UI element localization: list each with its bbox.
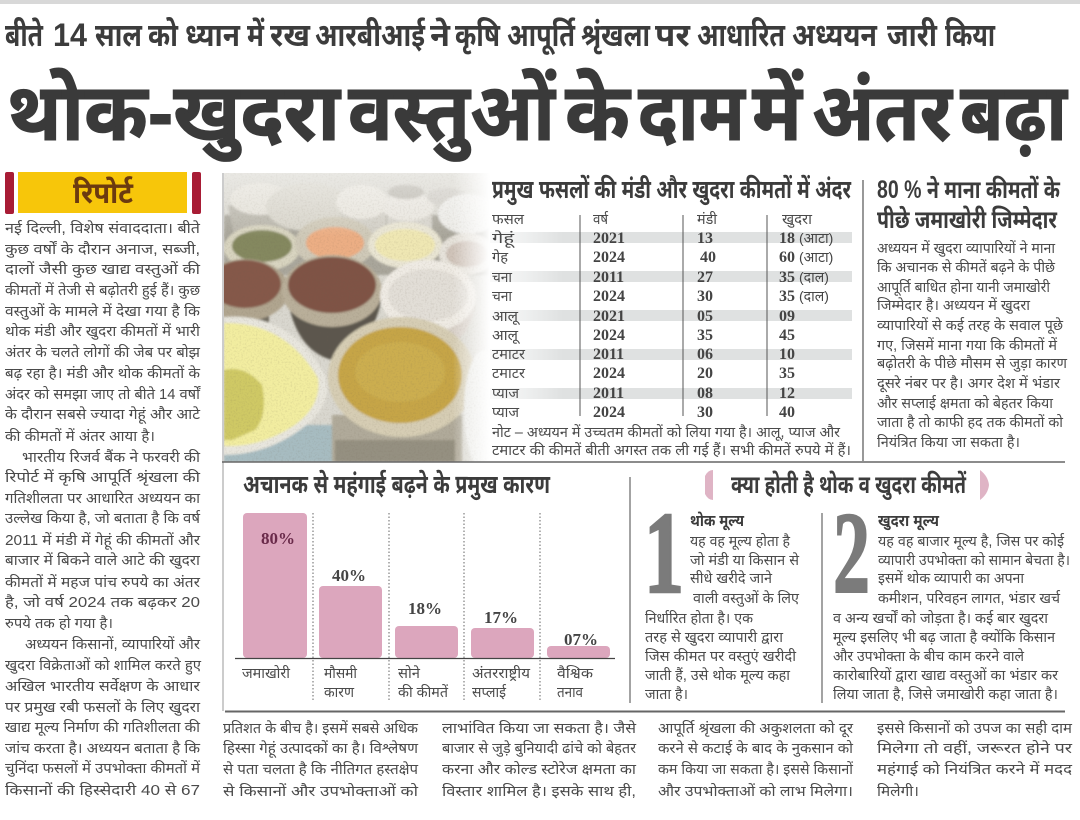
- retail price text: यह वह बाजार मूल्य है, जिस पर कोई: [878, 533, 1065, 551]
- panel: bar chart of causes: [235, 469, 615, 702]
- text block: main article column: कुछ वर्षों के दौरान अनाज, सब्जी,: [5, 240, 200, 259]
- bar values: 07%: [564, 630, 598, 649]
- text block: main article column: जांच करता है। अध्ययन बताता है कि: [5, 740, 201, 757]
- table mandi prices: [697, 230, 716, 421]
- text block: main article column: रुपये तक हो गया है।: [5, 614, 113, 632]
- table mandi prices: 27: [697, 269, 713, 286]
- table years: 2021: [593, 308, 625, 325]
- table mandi prices: 05: [697, 308, 713, 325]
- table retail prices: [779, 230, 833, 421]
- text block: main article column: बाजार में बिकने वाले आटे की खुदरा: [5, 551, 200, 570]
- retail price text: इसमें थोक व्यापारी का अपना: [878, 570, 1024, 587]
- text block: main article column: रिपोर्ट में कृषि आपूर्ति श्रृंखला की: [5, 469, 200, 487]
- title: दाम: [638, 68, 747, 157]
- text block: main article column: पर प्रमुख रबी फसलों के लिए खुदरा: [5, 698, 200, 717]
- table retail prices: 60 (आटा): [779, 249, 833, 266]
- hoarding body text: कि अचानक से कीमतें बढ़ने के पीछे: [877, 258, 1056, 276]
- text block: article continuation columns: मिलेगी।: [877, 782, 919, 800]
- text block: main article column: अंदर को समझा जाए तो बीते 14 वर्षों: [5, 385, 201, 403]
- panel: wholesale and retail explained: [644, 470, 1070, 703]
- bar labels: की कीमतें: [398, 684, 449, 701]
- hoarding body text: दूसरे नंबर पर है। अगर देश में भंडार: [877, 374, 1061, 393]
- hoarding body text: बढ़ोतरी के पीछे मौसम से जुड़ा कारण: [877, 354, 1068, 373]
- text block: main article column: अंतर के चलते लोगों की जेब पर बोझ: [5, 343, 201, 361]
- text block: article continuation columns: इससे किसानों को उपज का सही दाम: [877, 719, 1072, 737]
- wholesale price text: जाती हैं, उसे थोक मूल्य कहा: [645, 666, 790, 685]
- hoarding body text: आपूर्ति बाधित होना यानी जमाखोरी: [877, 279, 1050, 297]
- table header: फसल: [492, 212, 525, 228]
- report banner: [5, 172, 201, 214]
- retail price text: खुदरा मूल्य: [878, 513, 940, 531]
- text block: main article column: कीमतों में महज पांच रुपये का अंतर: [5, 573, 201, 591]
- bar values: 18%: [408, 599, 442, 618]
- subtitle: किया: [945, 17, 995, 53]
- wholesale price text: जिस कीमत पर वस्तुएं खरीदी: [645, 648, 796, 666]
- retail price text: लिया जाता है, जिसे जमाखोरी कहा जाता है।: [833, 685, 1058, 703]
- table note: नोट – अध्ययन में उच्चतम कीमतों को लिया गया है। आलू, प्याज और: [492, 424, 841, 442]
- wholesale price text: जाता है।: [645, 686, 688, 703]
- table mandi prices: 20: [697, 365, 713, 382]
- text block: article continuation columns: करना और कोल्ड स्टोरेज क्षमता का: [442, 760, 636, 778]
- subtitle: बीते: [5, 17, 44, 53]
- table mandi prices: 35: [697, 327, 713, 344]
- hoarding body text: [877, 239, 1068, 451]
- text block: main article column: के दौरान सबसे ज्यादा गेहूं और आटे: [5, 405, 201, 424]
- text block: article continuation columns: से पता चलता है कि नीतिगत हस्तक्षेप: [223, 760, 419, 778]
- text block: main article column: [5, 219, 202, 799]
- text block: main article column: की कीमतों में अंतर आया है।: [5, 428, 155, 445]
- subtitle: में: [247, 17, 265, 53]
- text block: main article column: खाद्य मूल्य निर्माण की गतिशीलता की: [5, 719, 200, 737]
- title: [7, 67, 1068, 162]
- text block: main article column: थोक मंडी और खुदरा कीमतों में भारी: [5, 323, 200, 341]
- wholesale price text: थोक मूल्य: [690, 512, 745, 531]
- hoarding body text: व्यापारियों से कई तरह के सवाल पूछे: [877, 316, 1064, 335]
- table shaded rows: [490, 232, 852, 399]
- table heading: प्रमुख फसलों की मंडी और खुदरा कीमतों में अंदर: [492, 174, 851, 205]
- subtitle: कृषि: [455, 17, 501, 55]
- bar labels: सप्लाई: [472, 684, 507, 701]
- table retail prices: 18 (आटा): [779, 230, 833, 247]
- table crop names: चना: [492, 289, 512, 305]
- wholesale price text: निर्धारित होता है। एक: [645, 610, 754, 627]
- table mandi prices: 13: [697, 230, 713, 247]
- retail price text: और उपभोक्ता के बीच काम करने वाले: [833, 647, 1025, 665]
- text block: main article column: वस्तुओं के मामले में देखा गया है कि: [5, 302, 201, 321]
- text block: article continuation columns: से किसानों और उपभोक्ताओं को: [223, 782, 418, 800]
- retail price text: व अन्य खर्चों को जोड़ता है। कई बार खुदरा: [833, 610, 1048, 628]
- table years: 2011: [593, 269, 624, 286]
- bar values: [261, 529, 598, 649]
- table retail prices: 12: [779, 385, 795, 402]
- subtitle: आरबीआई: [315, 17, 426, 53]
- table crop names: [492, 229, 526, 421]
- bars: [243, 513, 610, 658]
- subtitle: आपूर्ति: [507, 17, 576, 55]
- text block: article continuation columns: [223, 719, 1073, 800]
- wholesale price text: यह वह मूल्य होता है: [690, 533, 790, 551]
- subtitle: अध्ययन: [792, 17, 878, 53]
- table retail prices: 10: [779, 346, 795, 363]
- panel rules: [222, 173, 1065, 712]
- table header: [492, 211, 812, 229]
- subtitle: पर: [655, 17, 691, 53]
- title: अंतर: [812, 68, 954, 157]
- retail price text: कमीशन, परिवहन लागत, भंडार खर्च: [878, 590, 1061, 607]
- subtitle: आधारित: [697, 17, 786, 53]
- table crop names: टमाटर: [492, 347, 526, 363]
- text block: article continuation columns: करने से कटाई के बाद के नुकसान को: [658, 739, 853, 758]
- wholesale price text: जो मंडी या किसान से: [690, 551, 799, 569]
- text block: main article column: नई दिल्ली, विशेष संवाददाता। बीते: [5, 219, 201, 237]
- table years: 2011: [593, 385, 624, 402]
- text block: main article column: भारतीय रिजर्व बैंक ने फरवरी की: [22, 448, 200, 466]
- table retail prices: 35: [779, 365, 795, 382]
- table mandi prices: 40: [700, 249, 716, 266]
- text block: article continuation columns: लाभांवित किया जा सकता है। जैसे: [442, 719, 636, 737]
- table note: [492, 424, 851, 459]
- text block: article continuation columns: महंगाई को नियंत्रित करने में मदद: [877, 760, 1072, 778]
- retail price text: [833, 513, 1070, 703]
- table crop names: गेह: [492, 248, 508, 266]
- bar values: 80%: [261, 529, 295, 548]
- chart heading: अचानक से महंगाई बढ़ने के प्रमुख कारण: [243, 469, 551, 500]
- wholesale price text: [645, 512, 800, 703]
- wholesale price text: सीधे खरीदे जाने: [690, 569, 773, 587]
- text block: main article column: चुनिंदा फसलों में उपभोक्ता कीमतों में: [5, 760, 200, 778]
- hoarding body text: जाता है तो काफी हद तक कीमतों को: [877, 414, 1063, 431]
- explainer heading: क्या होती है थोक व खुदरा कीमतें: [731, 470, 967, 500]
- text block: article continuation columns: मिलेगा तो वहीं, जरूरत होने पर: [877, 739, 1073, 757]
- hoarding heading: [877, 175, 1061, 234]
- table years: 2024: [593, 404, 625, 421]
- subtitle: [5, 17, 995, 55]
- text block: main article column: किसानों की हिस्सेदारी 40 से 67: [5, 781, 200, 799]
- table years: 2024: [593, 365, 625, 382]
- table mandi prices: 08: [697, 385, 713, 402]
- title: बढ़ा: [960, 68, 1068, 157]
- numeral 2: 2: [833, 489, 870, 618]
- table years: [593, 230, 625, 421]
- bar values: 40%: [332, 566, 366, 585]
- table years: 2024: [593, 249, 625, 266]
- text block: article continuation columns: कम किया जा सकता है। इससे किसानों: [658, 760, 853, 778]
- table retail prices: 09: [779, 308, 795, 325]
- hoarding body text: और सप्लाई क्षमता को बेहतर किया: [877, 394, 1053, 412]
- title: वस्तुओं: [348, 68, 557, 162]
- bar labels: मौसमी: [324, 665, 357, 682]
- text block: article continuation columns: विस्तार शामिल है। इसके साथ ही,: [442, 782, 636, 800]
- table retail prices: 45: [779, 327, 795, 344]
- table retail prices: 40: [779, 404, 795, 421]
- text block: main article column: 2011 में मंडी में गेहूं की कीमतों और: [5, 531, 201, 550]
- wholesale price text: वाली वस्तुओं के लिए: [693, 589, 800, 608]
- subtitle: ध्यान: [185, 17, 241, 53]
- text block: main article column: खुदरा विक्रेताओं को शामिल करते हुए: [5, 656, 202, 675]
- text block: main article column: है, जो वर्ष 2024 तक बढ़कर 20: [5, 594, 200, 611]
- subtitle: 14: [53, 17, 87, 53]
- text block: article continuation columns: हिस्सा गेहूं उत्पादकों का है। विश्लेषण: [223, 739, 419, 758]
- hoarding body text: अध्ययन में खुदरा व्यापारियों ने माना: [877, 239, 1055, 258]
- table header: मंडी: [697, 211, 717, 228]
- table years: 2024: [593, 327, 625, 344]
- bar labels: वैश्विक: [557, 665, 594, 682]
- wholesale price text: तरह से खुदरा व्यापारी द्वारा: [645, 628, 783, 647]
- bar labels: अंतरराष्ट्रीय: [472, 665, 531, 682]
- report banner: रिपोर्ट: [73, 176, 134, 210]
- table years: 2024: [593, 288, 625, 305]
- hoarding body text: गए, जिसमें माना गया कि कीमतों में: [877, 337, 1057, 354]
- text block: main article column: कीमतों में तेजी से बढ़ोतरी हुई हैं। कुछ: [5, 281, 201, 300]
- panel: price table: [490, 174, 852, 459]
- table years: 2011: [593, 346, 624, 363]
- subtitle: को: [148, 17, 178, 53]
- subtitle: जारी: [887, 17, 937, 53]
- subtitle: रख: [270, 17, 311, 53]
- table crop names: गेहूं: [492, 229, 516, 248]
- panel: 80 percent hoarding: [877, 175, 1068, 451]
- text block: article continuation columns: प्रतिशत के बीच है। इसमें सबसे अधिक: [223, 719, 419, 737]
- hoarding body text: नियंत्रित किया जा सकता है।: [877, 434, 1020, 451]
- text block: main article column: अखिल भारतीय सर्वेक्षण के आधार: [5, 677, 201, 695]
- retail price text: मूल्य इसलिए भी बढ़ जाता है क्योंकि किसान: [833, 629, 1056, 647]
- bar labels: [242, 664, 594, 701]
- title: थोक-खुदरा: [7, 68, 341, 162]
- bar labels: तनाव: [557, 685, 584, 701]
- table crop names: प्याज: [492, 405, 519, 421]
- subtitle: ने: [430, 17, 451, 53]
- text block: main article column: गतिशीलता पर आधारित अध्ययन का: [5, 490, 200, 507]
- retail price text: कारोबारियों द्वारा खाद्य वस्तुओं का भंडार कर: [833, 667, 1059, 685]
- photo: sacks of grains and pulses: [224, 173, 487, 462]
- text block: article continuation columns: आपूर्ति श्रृंखला की अकुशलता को दूर: [658, 720, 854, 738]
- table crop names: आलू: [492, 309, 520, 326]
- text block: main article column: दालों जैसी कुछ खाद्य वस्तुओं की: [5, 261, 200, 279]
- table crop names: आलू: [492, 328, 520, 345]
- title: में: [752, 68, 804, 157]
- table mandi prices: 06: [697, 346, 713, 363]
- table retail prices: 35 (दाल): [779, 288, 829, 305]
- bar labels: जमाखोरी: [242, 665, 290, 682]
- table retail prices: 35 (दाल): [779, 269, 829, 286]
- table header: वर्ष: [593, 211, 609, 228]
- table crop names: प्याज: [492, 386, 519, 402]
- text block: article continuation columns: बाजार से जुड़े बुनियादी ढांचे को बेहतर: [442, 739, 637, 758]
- text block: main article column: उल्लेख किया है, जो बताता है कि वर्ष: [5, 509, 201, 527]
- bar labels: सोने: [398, 664, 421, 682]
- subtitle: साल: [95, 17, 143, 53]
- bar values: 17%: [484, 608, 518, 627]
- retail price text: व्यापारी उपभोक्ता को सामान बेचता है।: [878, 551, 1070, 569]
- bar labels: कारण: [324, 685, 354, 701]
- table note: टमाटर की कीमतें बीती अगस्त तक ली गई हैं। सभी कीमतें रुपये में हैं।: [492, 441, 851, 459]
- subtitle: श्रृंखला: [581, 17, 650, 55]
- title: के: [565, 67, 632, 157]
- text block: main article column: बढ़ रहा है। मंडी और थोक कीमतों के: [5, 364, 201, 382]
- table header: खुदरा: [782, 212, 812, 229]
- text block: article continuation columns: और उपभोक्ताओं को लाभ मिलेगा।: [658, 782, 853, 800]
- table crop names: चना: [492, 270, 512, 286]
- hoarding body text: जिम्मेदार है। अध्ययन में खुदरा: [877, 296, 1030, 315]
- table years: 2021: [593, 230, 625, 247]
- table mandi prices: 30: [697, 404, 713, 421]
- table mandi prices: 30: [697, 288, 713, 305]
- table crop names: टमाटर: [492, 366, 526, 382]
- numeral 1: 1: [644, 489, 684, 618]
- text block: main article column: अध्ययन किसानों, व्यापारियों और: [25, 636, 201, 653]
